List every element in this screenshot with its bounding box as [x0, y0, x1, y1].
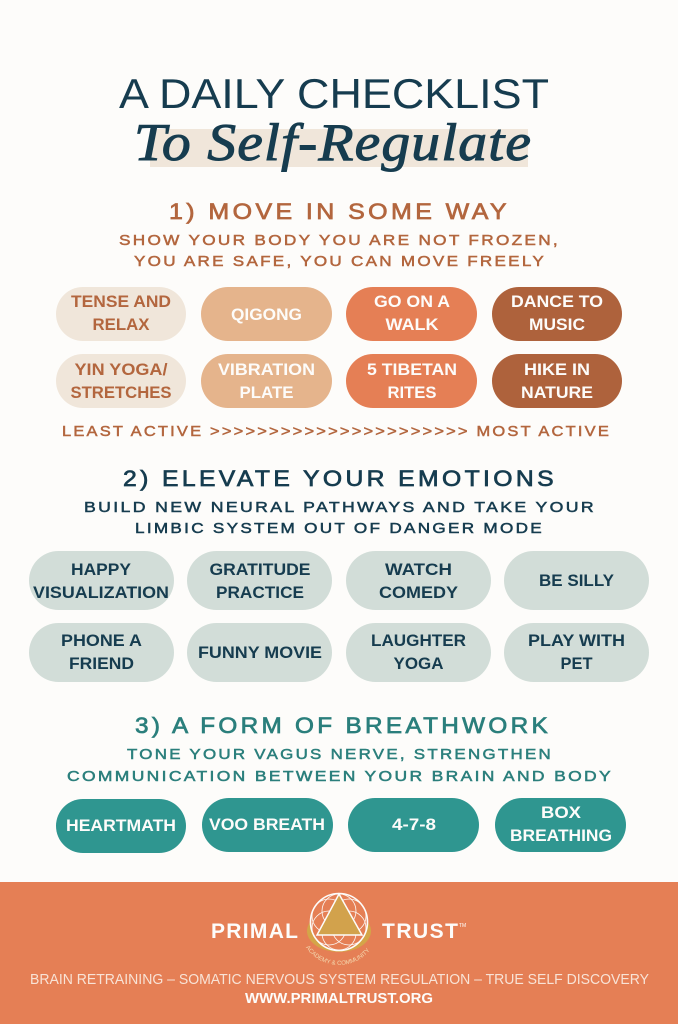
pill: play with pet: PLAY WITH — [528, 632, 625, 650]
pill: dance to music — [492, 287, 622, 341]
pill: watch comedy: WATCH — [385, 561, 452, 579]
section 1 description: SHOW YOUR BODY YOU ARE NOT FROZEN, — [119, 232, 560, 249]
pill: gratitude practice — [187, 551, 332, 610]
title: To Self-Regulate — [134, 114, 532, 172]
pill: qigong — [201, 287, 332, 341]
pill: 4-7-8 — [348, 798, 479, 852]
section 2 description: BUILD NEW NEURAL PATHWAYS AND TAKE YOUR — [84, 499, 596, 516]
pill: laughter yoga — [346, 623, 491, 682]
pill: funny movie — [187, 623, 332, 682]
pill: vibration plate: PLATE — [240, 384, 294, 402]
trademark: TM — [459, 923, 466, 929]
pill: play with pet — [504, 623, 649, 682]
section 3 description: TONE YOUR VAGUS NERVE, STRENGTHEN — [127, 746, 553, 763]
section 3 description: COMMUNICATION BETWEEN YOUR BRAIN AND BODY — [67, 768, 613, 785]
pill: 4-7-8: 4-7-8 — [392, 816, 436, 834]
tagline: BRAIN RETRAINING – SOMATIC NERVOUS SYSTEM REGULATION – TRUE SELF DISCOVERY — [30, 971, 649, 988]
logo icon — [306, 892, 371, 965]
pill: go on a walk: GO ON A — [374, 293, 450, 311]
pill: yin yoga stretches: STRETCHES — [70, 384, 172, 402]
section 3 description — [67, 746, 613, 785]
logo wordmark: primal: PRIMAL — [211, 920, 298, 943]
title — [119, 70, 549, 172]
pill: tense and relax: RELAX — [92, 316, 150, 334]
pill: laughter yoga: LAUGHTER — [371, 632, 466, 650]
pill: box breathing: BREATHING — [510, 827, 612, 845]
section 1 description — [119, 232, 560, 270]
pill: yin yoga stretches — [56, 354, 186, 408]
pill: tense and relax — [56, 287, 186, 341]
pill: happy visualization — [29, 551, 174, 610]
website: WWW.PRIMALTRUST.ORG — [245, 991, 433, 1007]
footer band — [0, 882, 678, 1024]
pill: play with pet: PET — [560, 655, 592, 673]
pill: tense and relax: TENSE AND — [71, 293, 171, 311]
title: A DAILY CHECKLIST — [119, 70, 549, 117]
pill: happy visualization: HAPPY — [71, 561, 131, 579]
pill: voo breath: VOO BREATH — [209, 816, 325, 834]
pill: phone a friend: PHONE A — [61, 632, 142, 650]
logo wordmark: trust: TRUST — [382, 920, 458, 943]
pill: be silly: BE SILLY — [539, 572, 614, 590]
pill: heartmath: HEARTMATH — [66, 817, 176, 835]
pill: hike in nature — [492, 354, 622, 408]
section 1 heading: 1) MOVE IN SOME WAY — [169, 199, 510, 224]
pill: hike in nature: NATURE — [521, 384, 593, 402]
pill: heartmath — [56, 799, 186, 853]
pill: funny movie: FUNNY MOVIE — [198, 644, 322, 662]
pill: 5 tibetan rites — [346, 354, 477, 408]
pill: laughter yoga: YOGA — [394, 655, 444, 673]
section 2 description: LIMBIC SYSTEM OUT OF DANGER MODE — [135, 520, 544, 537]
pill: dance to music: MUSIC — [529, 316, 585, 334]
section 1 description: YOU ARE SAFE, YOU CAN MOVE FREELY — [134, 253, 546, 270]
pill: 5 tibetan rites: RITES — [388, 384, 436, 402]
pill: vibration plate — [201, 354, 332, 408]
pill: happy visualization: VISUALIZATION — [33, 584, 169, 602]
pill: box breathing — [495, 798, 626, 852]
pill: yin yoga stretches: YIN YOGA/ — [74, 361, 168, 379]
pill: dance to music: DANCE TO — [511, 293, 603, 311]
activity scale label: LEAST ACTIVE >>>>>>>>>>>>>>>>>>>>>> MOST ACTIVE — [62, 423, 611, 440]
pill: be silly — [504, 551, 649, 610]
pill: 5 tibetan rites: 5 TIBETAN — [367, 361, 457, 379]
pill: phone a friend — [29, 623, 174, 682]
section 2 description — [84, 499, 596, 537]
pill: hike in nature: HIKE IN — [524, 361, 590, 379]
pill: go on a walk — [346, 287, 477, 341]
pill: gratitude practice: PRACTICE — [216, 584, 304, 602]
pill: gratitude practice: GRATITUDE — [210, 561, 310, 579]
section 3 heading: 3) A FORM OF BREATHWORK — [135, 713, 551, 738]
pill: qigong: QIGONG — [231, 306, 302, 324]
pill: box breathing: BOX — [541, 804, 581, 822]
pill: watch comedy — [346, 551, 491, 610]
pill: phone a friend: FRIEND — [69, 655, 134, 673]
logo icon: ACADEMY & COMMUNITY — [306, 946, 369, 965]
pill: watch comedy: COMEDY — [379, 584, 458, 602]
pill: voo breath — [202, 798, 333, 852]
pill: vibration plate: VIBRATION — [218, 361, 315, 379]
section 2 heading: 2) ELEVATE YOUR EMOTIONS — [123, 466, 557, 491]
pill: go on a walk: WALK — [386, 316, 439, 334]
